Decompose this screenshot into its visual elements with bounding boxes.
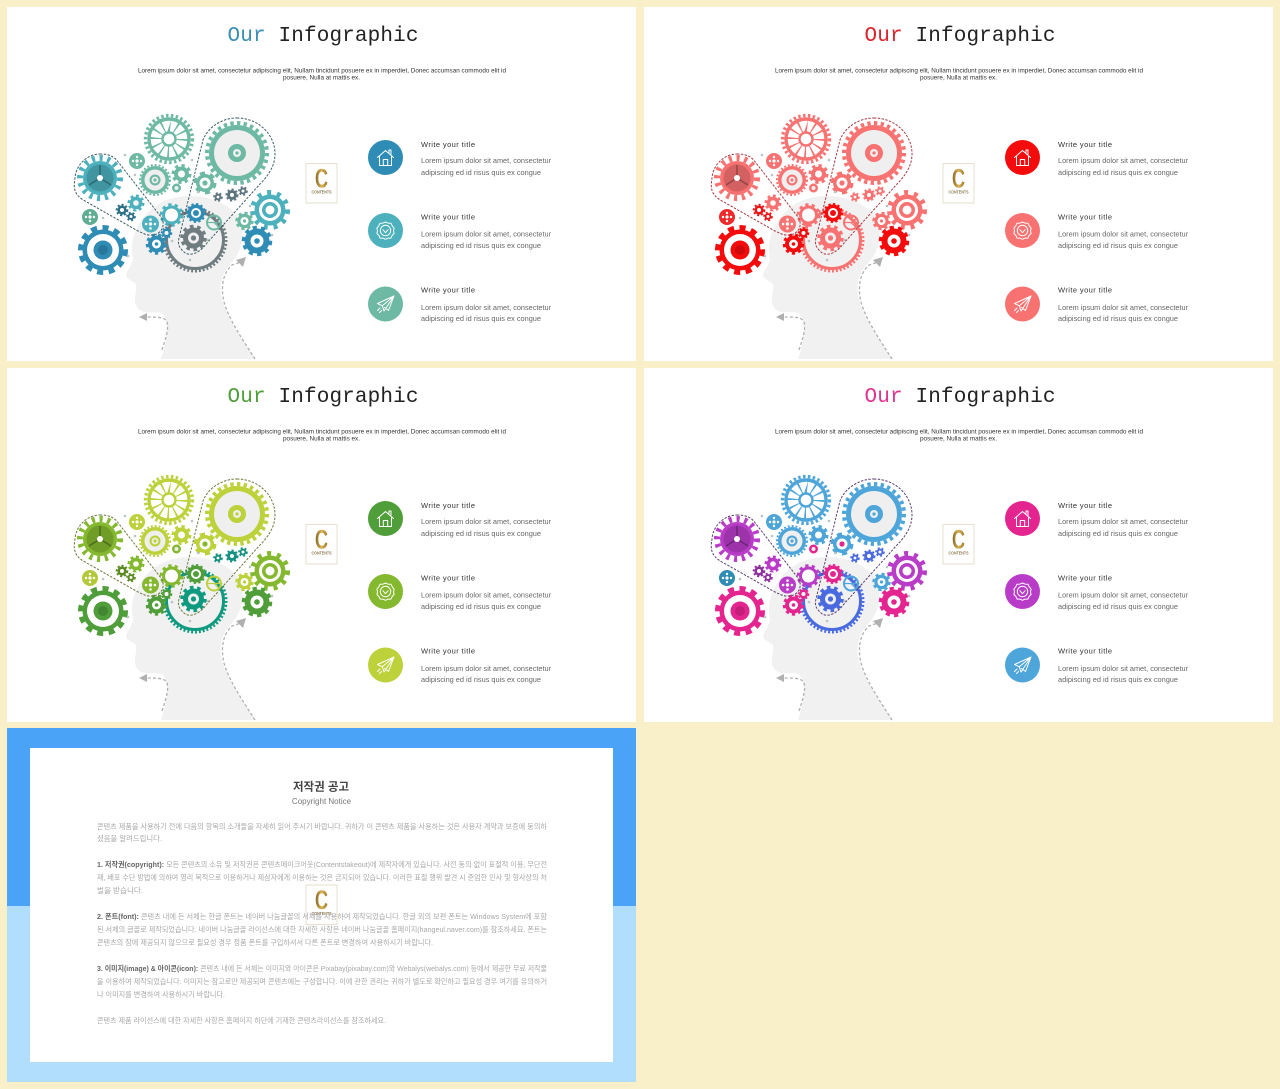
logo: CONTENTS: [312, 911, 332, 916]
item 2: Lorem ipsum dolor sit amet, consectetur: [1058, 590, 1188, 600]
logo: C: [315, 524, 328, 554]
gear cluster: [80, 116, 288, 272]
item 1: Lorem ipsum dolor sit amet, consectetur: [1058, 156, 1188, 165]
item 1: Lorem ipsum dolor sit amet, consectetur: [421, 156, 551, 165]
item 2: adipiscing ed id risus quis ex congue: [421, 602, 541, 611]
logo: CONTENTS: [312, 190, 332, 194]
logo: C: [315, 164, 328, 194]
item 3: [368, 646, 551, 684]
logo: C: [952, 164, 965, 194]
item 2: Lorem ipsum dolor sit amet, consectetur: [1058, 230, 1188, 238]
gear cluster: [80, 476, 288, 633]
intro text: Lorem ipsum dolor sit amet, consectetur adipiscing elit, Nullam tincidunt posuere ex in imperdiet, Donec accumsan commodo elit id: [138, 68, 506, 74]
notice intro paragraph: [97, 822, 547, 843]
dashed arrows: [139, 618, 255, 720]
item 1: adipiscing ed id risus quis ex congue: [1058, 529, 1178, 538]
logo: C: [315, 885, 328, 915]
dashed arrows: [139, 257, 255, 359]
item 3: Lorem ipsum dolor sit amet, consectetur: [1058, 303, 1188, 312]
intro text: Lorem ipsum dolor sit amet, consectetur adipiscing elit, Nullam tincidunt posuere ex in imperdiet, Donec accumsan commodo elit id: [138, 428, 506, 436]
item 3: Lorem ipsum dolor sit amet, consectetur: [421, 303, 551, 312]
logo: [943, 524, 974, 564]
item 2: [1005, 574, 1188, 611]
intro text: posuere, Nulla at mattis ex.: [920, 436, 997, 442]
notice section: font: 콘텐츠의 참에 제공되지 않으므로 필요성 경우 정품 폰트를 구입하셔서 다른 폰트로 변경하여 사용하시기 바랍니다.: [97, 938, 433, 947]
head silhouette: [126, 557, 255, 720]
head silhouette: [763, 196, 892, 359]
notice heading: Copyright Notice: [292, 797, 352, 806]
logo: [306, 885, 337, 924]
item 3: adipiscing ed id risus quis ex congue: [1058, 675, 1178, 684]
logo: [306, 524, 337, 564]
dashed gear outlines: [74, 118, 275, 254]
item 1: Lorem ipsum dolor sit amet, consectetur: [1058, 517, 1188, 526]
dashed arrows: [776, 618, 892, 720]
panel: red infographic: [644, 7, 1273, 361]
item 2: Write your title: [421, 574, 475, 582]
notice heading: 저작권 공고: [293, 780, 349, 794]
notice section: font: [97, 912, 547, 947]
logo: [306, 164, 337, 203]
item 2: [368, 574, 551, 611]
item 1: adipiscing ed id risus quis ex congue: [421, 529, 541, 538]
intro text: [775, 68, 1143, 82]
item 1: [368, 140, 551, 177]
notice section: copyright: 재, 배포 수단 방법에 의하여 영리 목적으로 이용하거나 제삼자에게 이용하는 것은 금지되어 있습니다. 이러한 표절 행위 발견 시 준엄한 민사 및 형사상의 처: [97, 873, 547, 882]
item 1: Write your title: [1058, 140, 1112, 149]
title: Our Infographic: [864, 386, 1056, 409]
item 2: Write your title: [421, 212, 475, 222]
item 3: [1005, 286, 1188, 323]
item 3: adipiscing ed id risus quis ex congue: [421, 675, 541, 684]
item 1: [1005, 140, 1188, 177]
gear cluster: [717, 476, 924, 633]
item 3: adipiscing ed id risus quis ex congue: [421, 314, 541, 323]
notice section: font: 2. 폰트(font): 콘텐츠 내에 든 서체는 한글 폰트는 네이버 나눔글꼴의 서체를 사용하여 제작되었습니다. 한글 외의 보편 폰트는 Windows System에 포함: [97, 912, 547, 921]
item 3: [368, 286, 551, 323]
dashed gear outlines: [711, 118, 912, 254]
notice section: image and icon: 3. 이미지(image) & 아이콘(icon): 콘텐츠 내에 든 서체는 이미지와 아이콘은 Pixabay(pixabay.com)와 Webalys(webalys.com) 등에서 제공한 무료 저작물: [97, 964, 547, 973]
item 3: Lorem ipsum dolor sit amet, consectetur: [421, 664, 551, 673]
dashed gear outlines: [74, 479, 275, 615]
title: Our Infographic: [228, 25, 418, 48]
logo: CONTENTS: [948, 550, 969, 556]
notice intro paragraph: 셨음을 알려드립니다.: [97, 834, 162, 843]
panel: pink and blue infographic: [644, 368, 1273, 722]
notice section: image and icon: 나 이미지를 변경하여 사용하시기 바랍니다.: [97, 990, 225, 999]
dashed arrows: [776, 257, 892, 359]
dashed gear outlines: [711, 479, 912, 615]
notice section: image and icon: [97, 964, 547, 999]
gear cluster: [717, 116, 924, 272]
item 1: [368, 501, 551, 538]
logo: C: [952, 524, 965, 554]
notice section: copyright: 벌을 받습니다.: [97, 886, 143, 895]
intro text: Lorem ipsum dolor sit amet, consectetur adipiscing elit, Nullam tincidunt posuere ex in imperdiet, Donec accumsan commodo elit id: [775, 68, 1143, 74]
notice heading: [292, 780, 352, 806]
item 3: Write your title: [421, 646, 475, 656]
item 3: Lorem ipsum dolor sit amet, consectetur: [1058, 664, 1188, 673]
notice closing line: 콘텐츠 제품 라이선스에 대한 자세한 사항은 홈페이지 하단에 기재한 콘텐츠라이선스를 참조하세요.: [97, 1016, 386, 1025]
item 2: [368, 212, 551, 250]
head silhouette: [126, 196, 255, 359]
intro text: [138, 68, 506, 82]
item 3: [1005, 646, 1188, 684]
item 2: adipiscing ed id risus quis ex congue: [421, 241, 541, 250]
intro text: posuere, Nulla at mattis ex.: [920, 74, 997, 82]
item 3: Write your title: [421, 286, 475, 294]
item 1: adipiscing ed id risus quis ex congue: [421, 168, 541, 177]
title: Our Infographic: [228, 386, 418, 409]
item 3: adipiscing ed id risus quis ex congue: [1058, 314, 1178, 323]
item 1: Lorem ipsum dolor sit amet, consectetur: [421, 517, 551, 526]
intro text: posuere, Nulla at mattis ex.: [283, 436, 360, 442]
item 3: Write your title: [1058, 286, 1112, 294]
item 2: Lorem ipsum dolor sit amet, consectetur: [421, 230, 551, 238]
intro text: posuere, Nulla at mattis ex.: [283, 74, 360, 82]
item 2: [1005, 212, 1188, 250]
notice section: image and icon: 을 이용하여 제작되었습니다. 이미지는 참고로만 제공되며 콘텐츠에는 구성합니다. 이에 관한 권리는 귀하가 별도로 확인하고 필요성 경우 여기를 유의하거: [97, 977, 547, 986]
item 1: Write your title: [421, 140, 475, 149]
item 1: Write your title: [1058, 501, 1112, 510]
panel: green infographic: [7, 368, 636, 722]
item 2: Lorem ipsum dolor sit amet, consectetur: [421, 590, 551, 600]
notice section: font: 된 서체의 글꼴로 제작되었습니다. 네이버 나눔글꼴 라이선스에 대한 자세한 사항은 네이버 나눔글꼴 홈페이지(hangeul.naver.com)를 참조하세요. 폰트는: [97, 925, 547, 934]
panel: copyright notice: [7, 728, 636, 1082]
notice section: copyright: [97, 860, 547, 895]
item 1: [1005, 501, 1188, 538]
item 3: Write your title: [1058, 646, 1112, 656]
logo: CONTENTS: [948, 190, 969, 194]
notice section: copyright: 1. 저작권(copyright): 모든 콘텐츠의 소유 및 저작권은 콘텐츠메이크어웃(Contentstakeout)에 제작자에게 있습니다. 사전 동의 없이 표절적 이용, 무단전: [97, 860, 547, 869]
notice intro paragraph: 콘텐츠 제품을 사용하기 전에 다음의 항목의 소개들을 자세히 읽어 주시기 바랍니다. 귀하가 이 콘텐츠 제품을 사용하는 것은 사용자 계약과 보증에 동의하: [97, 822, 547, 831]
panel: blue infographic: [7, 7, 636, 361]
item 1: adipiscing ed id risus quis ex congue: [1058, 168, 1178, 177]
intro text: [138, 428, 506, 442]
item 2: Write your title: [1058, 574, 1112, 582]
head silhouette: [763, 557, 892, 720]
item 2: adipiscing ed id risus quis ex congue: [1058, 241, 1178, 250]
intro text: Lorem ipsum dolor sit amet, consectetur adipiscing elit, Nullam tincidunt posuere ex in imperdiet, Donec accumsan commodo elit id: [775, 428, 1143, 436]
item 2: Write your title: [1058, 212, 1112, 222]
logo: CONTENTS: [312, 550, 332, 556]
item 1: Write your title: [421, 501, 475, 510]
title: Our Infographic: [864, 25, 1056, 48]
intro text: [775, 428, 1143, 442]
logo: [943, 164, 974, 203]
item 2: adipiscing ed id risus quis ex congue: [1058, 602, 1178, 611]
